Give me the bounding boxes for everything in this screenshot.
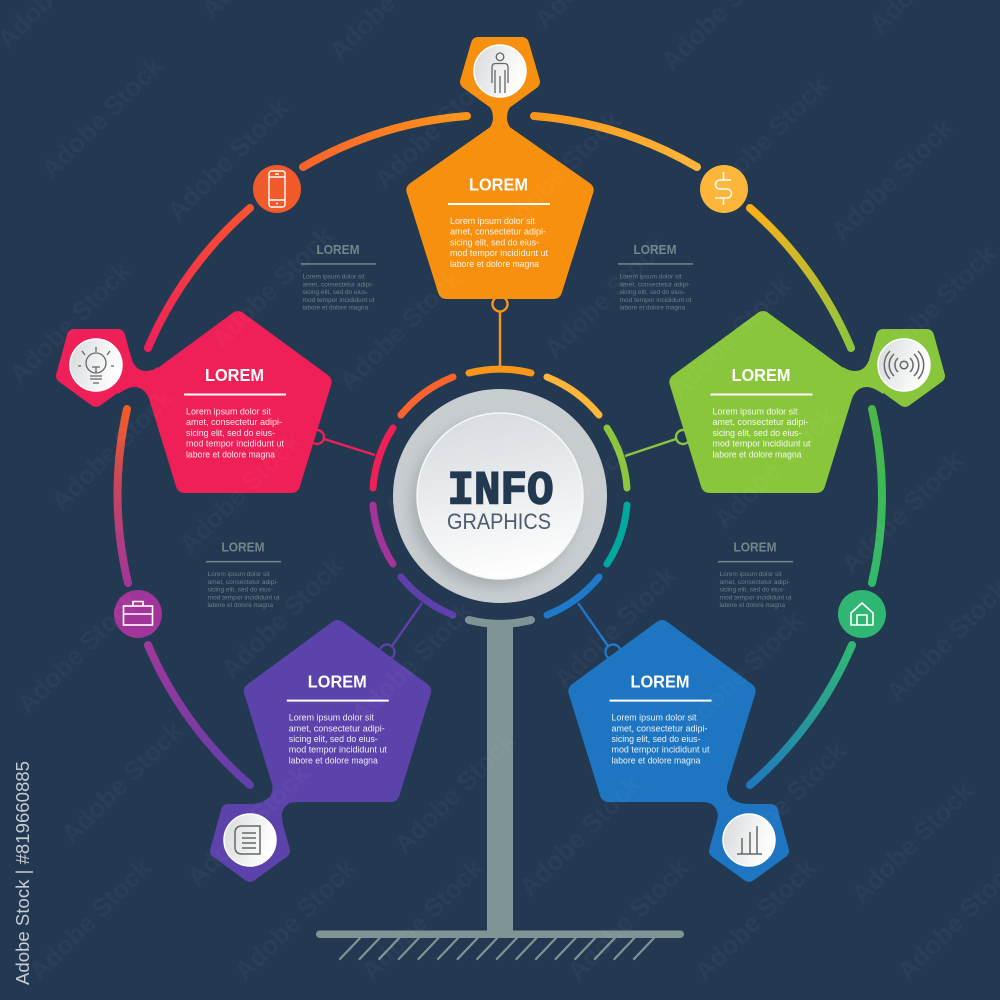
watermark: Adobe Stock xyxy=(345,595,479,729)
watermark: Adobe Stock xyxy=(228,852,362,986)
watermark: Adobe Stock xyxy=(35,50,169,184)
icon: phone xyxy=(253,165,301,213)
secondary text: bottom right: labore et dolore magna xyxy=(720,602,785,609)
text: green panel xyxy=(710,365,812,459)
text: orange panel: labore et dolore magna xyxy=(450,259,539,269)
secondary text: bottom left: mod tempor incididunt ut xyxy=(208,594,280,602)
panel: blue xyxy=(576,628,782,875)
watermark: Adobe Stock xyxy=(215,550,349,684)
watermark: Adobe Stock xyxy=(388,725,522,859)
icon: document xyxy=(224,814,276,866)
text: orange panel: sicing elit, sed do eius- xyxy=(450,237,539,247)
icon: bar chart xyxy=(723,814,775,866)
watermark: Adobe Stock xyxy=(173,425,307,559)
panel: purple xyxy=(217,628,423,875)
watermark: Adobe Stock xyxy=(700,70,834,204)
watermark: Adobe Stock xyxy=(333,262,467,396)
text: blue panel: LOREM xyxy=(630,671,690,691)
watermark: Adobe Stock xyxy=(493,105,627,239)
stand with hatched ground xyxy=(316,622,684,959)
watermark: Adobe Stock xyxy=(205,220,339,354)
secondary text: top left: Lorem ipsum dolor sit xyxy=(302,274,365,280)
secondary text: top left: LOREM xyxy=(316,242,360,257)
watermark: Adobe Stock xyxy=(718,735,852,869)
secondary text: top left: mod tempor incididunt ut xyxy=(302,297,375,304)
secondary text: top left: amet, consectetur adipi- xyxy=(302,281,373,288)
text: red panel: amet, consectetur adipi- xyxy=(186,417,282,427)
text: green panel: amet, consectetur adipi- xyxy=(712,417,809,427)
text: purple panel: Lorem ipsum dolor sit xyxy=(289,713,374,723)
text: blue panel xyxy=(610,671,712,765)
watermark: Adobe Stock xyxy=(548,560,682,694)
watermark: Adobe Stock xyxy=(688,852,822,986)
secondary text: top right: LOREM xyxy=(634,242,676,257)
secondary text: top right: amet, consectetur adipi- xyxy=(620,281,690,288)
watermark: Adobe Stock xyxy=(55,715,189,849)
stock credit: Adobe Stock | #819660885 xyxy=(13,761,33,985)
secondary text: top left: sicing elit, sed do eius- xyxy=(302,289,368,296)
connectors from panels to inner ring xyxy=(310,296,690,660)
text: blue panel: sicing elit, sed do eius- xyxy=(612,734,701,744)
secondary text: bottom left: Lorem ipsum dolor sit xyxy=(208,571,270,578)
secondary text: bottom left: amet, consectetur adipi- xyxy=(208,579,278,586)
secondary text: top right: mod tempor incididunt ut xyxy=(620,297,692,304)
inner segmented ring xyxy=(373,369,627,624)
secondary text: bottom right: sicing elit, sed do eius- xyxy=(720,587,785,594)
text: red panel: LOREM xyxy=(205,365,264,385)
text: blue panel: amet, consectetur adipi- xyxy=(612,723,708,733)
text: green panel: mod tempor incididunt ut xyxy=(712,439,811,449)
center hub xyxy=(393,389,607,603)
text: green panel: labore et dolore magna xyxy=(712,449,802,459)
text: green panel: Lorem ipsum dolor sit xyxy=(712,406,798,416)
secondary text: top right: sicing elit, sed do eius- xyxy=(620,289,685,296)
watermark: Adobe Stock xyxy=(845,775,979,909)
icon: house xyxy=(838,590,886,638)
watermark: Adobe Stock xyxy=(368,60,502,194)
panel: orange xyxy=(414,44,586,291)
watermark: Adobe Stock xyxy=(825,112,959,246)
secondary text: bottom right: mod tempor incididunt ut xyxy=(720,594,792,602)
watermark: Adobe Stock xyxy=(675,605,809,739)
text: blue panel: Lorem ipsum dolor sit xyxy=(612,713,697,723)
text: red panel: Lorem ipsum dolor sit xyxy=(186,406,271,416)
panel: red xyxy=(63,319,324,485)
watermark: Adobe Stock xyxy=(378,390,512,524)
secondary text: bottom left: LOREM xyxy=(222,540,264,555)
icon: briefcase xyxy=(114,590,162,638)
watermark: Adobe Stock xyxy=(503,435,637,569)
watermark: Adobe Stock xyxy=(23,852,157,986)
text: purple panel: amet, consectetur adipi- xyxy=(289,723,385,733)
secondary text: top right xyxy=(618,242,693,312)
secondary text: top left: labore et dolore magna xyxy=(302,304,368,312)
text: green panel: sicing elit, sed do eius- xyxy=(712,428,802,438)
secondary text: bottom right: Lorem ipsum dolor sit xyxy=(720,571,782,578)
watermark: Adobe Stock xyxy=(835,445,969,579)
watermark: Adobe Stock xyxy=(161,92,295,226)
text: green panel: LOREM xyxy=(732,365,790,385)
watermark: Adobe Stock xyxy=(355,852,489,986)
text: orange panel: LOREM xyxy=(469,175,528,195)
text: purple panel xyxy=(287,671,389,765)
text: purple panel: labore et dolore magna xyxy=(289,755,378,765)
text: red panel xyxy=(184,365,286,459)
outer ring arcs xyxy=(118,116,882,785)
watermark: Adobe Stock xyxy=(538,230,672,364)
text: red panel: sicing elit, sed do eius- xyxy=(186,428,275,438)
watermark: Adobe Stock xyxy=(561,852,695,986)
watermark: Adobe Stock xyxy=(868,238,1000,372)
text: purple panel: LOREM xyxy=(308,671,367,691)
text: purple panel: mod tempor incididunt ut xyxy=(289,745,387,755)
text: orange panel xyxy=(448,175,550,269)
watermark: Adobe Stock xyxy=(181,758,315,892)
watermark: Adobe Stock xyxy=(708,400,842,534)
secondary text: bottom left xyxy=(206,540,281,609)
watermark: Adobe Stock xyxy=(45,382,179,516)
watermark: Adobe Stock xyxy=(513,768,647,902)
secondary text: top right: Lorem ipsum dolor sit xyxy=(620,274,682,280)
secondary text: top right: labore et dolore magna xyxy=(620,304,685,312)
watermark: Adobe Stock xyxy=(663,270,797,404)
icon: dollar xyxy=(700,165,748,213)
text: blue panel: mod tempor incididunt ut xyxy=(612,745,710,755)
text: orange panel: amet, consectetur adipi- xyxy=(450,227,546,237)
secondary text: top left xyxy=(301,242,376,312)
icon: light bulb xyxy=(70,339,122,391)
secondary text: bottom right: amet, consectetur adipi- xyxy=(720,579,790,586)
title: INFO: INFO xyxy=(448,466,554,518)
secondary text: bottom right: LOREM xyxy=(734,540,776,555)
icon: person xyxy=(474,45,526,97)
secondary text: bottom right xyxy=(718,540,793,609)
icon: signal xyxy=(878,339,930,391)
text: blue panel: labore et dolore magna xyxy=(612,755,700,765)
subtitle: GRAPHICS: GRAPHICS xyxy=(447,509,551,534)
text: red panel: labore et dolore magna xyxy=(186,449,275,459)
text: red panel: mod tempor incididunt ut xyxy=(186,439,284,449)
text: orange panel: Lorem ipsum dolor sit xyxy=(450,216,535,226)
text: purple panel: sicing elit, sed do eius- xyxy=(289,734,378,744)
panel: green xyxy=(677,319,938,485)
secondary text: bottom left: labore et dolore magna xyxy=(208,602,273,609)
watermark: Adobe Stock xyxy=(11,585,145,719)
text: orange panel: mod tempor incididunt ut xyxy=(450,248,548,258)
watermark: Adobe Stock xyxy=(3,255,137,389)
secondary text: bottom left: sicing elit, sed do eius- xyxy=(208,587,273,594)
